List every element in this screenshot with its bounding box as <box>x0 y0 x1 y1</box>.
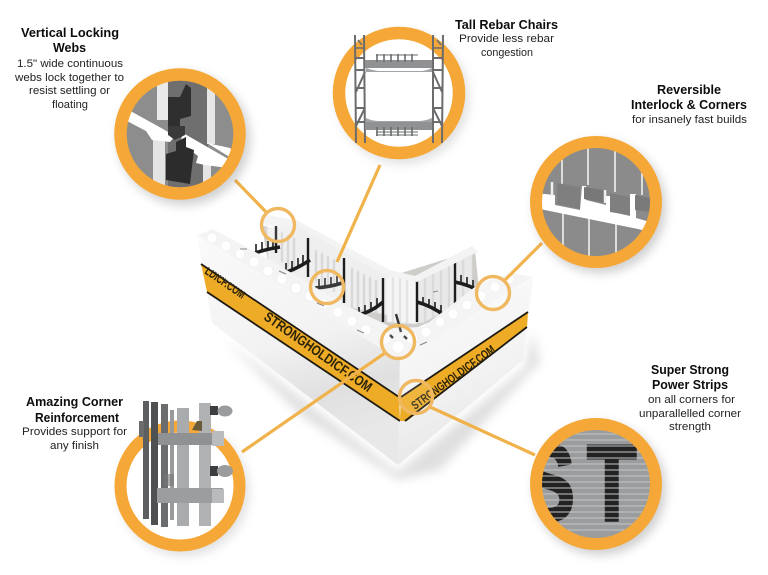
block interior floor <box>262 225 480 335</box>
label: corner reinforcement: Reinforcement <box>35 410 120 425</box>
back inner wall <box>267 224 472 324</box>
label: power strips: Super Strong <box>651 362 729 377</box>
black web ties <box>253 224 483 322</box>
corner reinforcement rails <box>139 401 233 527</box>
corner panel <box>387 276 416 324</box>
label: corner reinforcement: Provides support for <box>22 426 127 438</box>
left outer face <box>197 235 400 465</box>
band text left: STRONGHOLDICF.COM <box>261 308 375 395</box>
label: reversible interlock: Interlock & Corners <box>631 97 747 112</box>
label: tall rebar chairs: congestion <box>481 47 533 59</box>
label: vertical locking webs: 1.5" wide continuous <box>17 58 124 70</box>
right yellow band <box>400 312 528 421</box>
label: corner reinforcement: any finish <box>50 440 99 452</box>
label: vertical locking webs: Webs <box>53 40 86 55</box>
band text left clipped: LDICF.COM <box>202 263 249 302</box>
label: vertical locking webs: webs lock together to <box>14 72 124 84</box>
label: power strips <box>639 362 741 433</box>
label: vertical locking webs <box>14 25 124 111</box>
label: tall rebar chairs <box>455 17 558 59</box>
ICF block corner model <box>197 214 540 480</box>
small locator rings <box>262 208 510 414</box>
circle: reversible interlock and corners <box>534 140 666 273</box>
right outer face <box>398 278 533 465</box>
circle: amazing corner reinforcement <box>119 401 249 556</box>
label: tall rebar chairs: Tall Rebar Chairs <box>455 17 558 32</box>
label: reversible interlock: Reversible <box>657 82 721 97</box>
connector lines <box>235 165 542 455</box>
left yellow band <box>201 264 400 421</box>
label: vertical locking webs: floating <box>52 99 88 111</box>
label: corner reinforcement: Amazing Corner <box>26 394 123 409</box>
circle: tall rebar chairs <box>337 32 469 164</box>
circle: super strong power strips <box>521 423 666 555</box>
band text right: STRONGHOLDICF.COM <box>409 342 498 412</box>
label: vertical locking webs: resist settling or <box>29 85 110 97</box>
circle: super strong power strips: T <box>587 424 636 544</box>
foam bumps <box>207 233 514 353</box>
label: corner reinforcement <box>22 394 127 452</box>
left wall top face <box>197 229 533 360</box>
label: reversible interlock <box>631 82 748 126</box>
label: power strips: strength <box>669 421 711 433</box>
strip letters: S <box>521 424 575 544</box>
back wall top ridge <box>262 214 478 282</box>
label: tall rebar chairs: Provide less rebar <box>459 33 554 45</box>
corner ties <box>390 314 407 339</box>
label: vertical locking webs: Vertical Locking <box>21 25 119 40</box>
label: power strips: Power Strips <box>652 377 728 392</box>
label: power strips: unparallelled corner <box>639 408 741 420</box>
label: reversible interlock: for insanely fast builds <box>632 114 748 126</box>
rebar chair frame <box>355 35 443 143</box>
circle: vertical locking webs <box>118 73 250 205</box>
label: power strips: on all corners for <box>648 394 735 406</box>
return inner wall <box>415 255 472 323</box>
